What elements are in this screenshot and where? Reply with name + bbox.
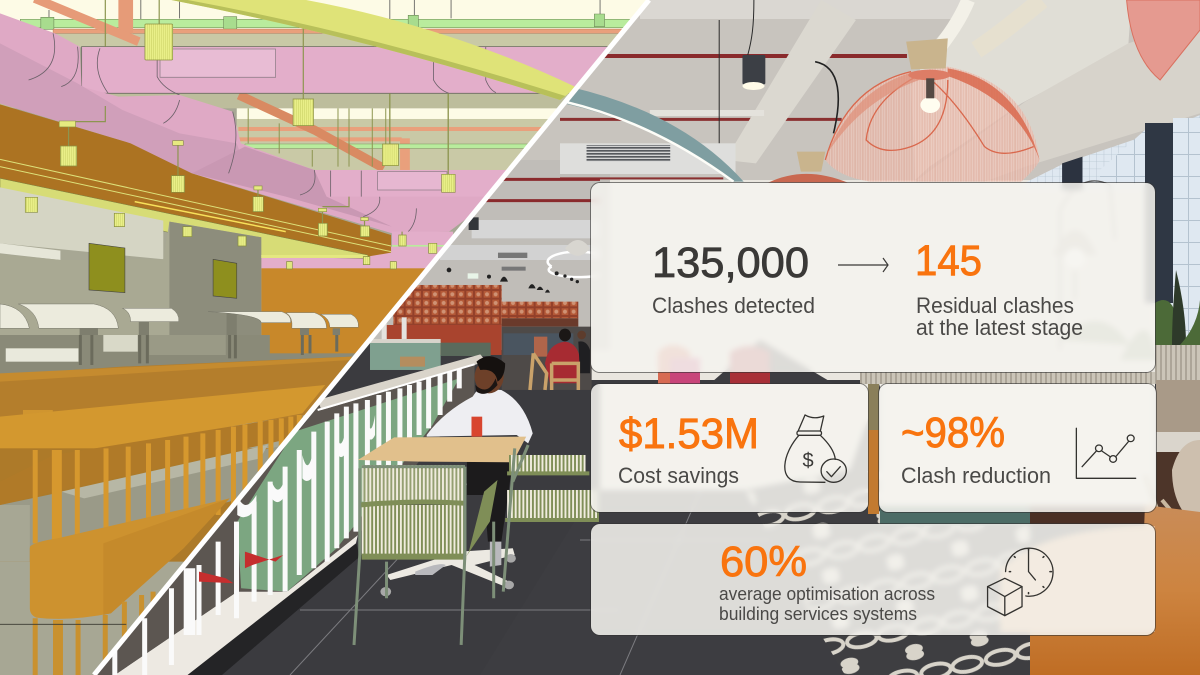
- label: cost savings: Cost savings: [618, 463, 739, 488]
- stat: 145: 145: [915, 237, 982, 285]
- right-hand furniture: [600, 118, 1200, 675]
- diagonal divider: [94, 0, 649, 675]
- orange bulkhead: [0, 104, 391, 258]
- area under rail: [0, 448, 268, 562]
- label: residual clashes: [916, 293, 1083, 340]
- upper pink duct: [82, 47, 653, 95]
- floor: [480, 340, 1030, 675]
- stat: $1.53M: $1.53M: [619, 410, 759, 458]
- table: [358, 437, 526, 462]
- lower mid services: [0, 94, 568, 108]
- stat: 135,000: 135,000: [652, 239, 809, 287]
- white arched balusters: [115, 367, 459, 675]
- black base: [188, 542, 360, 675]
- orange pipes: [118, 0, 133, 33]
- label: residual clashes: Residual clashes: [916, 293, 1074, 318]
- panel: cost savings: [591, 384, 868, 512]
- panel: clashes detected vs residual clashes: [591, 183, 1155, 372]
- stat: 60%: 60%: [720, 538, 807, 586]
- hangers: [59, 0, 448, 235]
- flower pendant lamp: [825, 38, 1040, 182]
- terrazzo top: [318, 354, 486, 410]
- pendant light: [742, 55, 765, 90]
- restaurant background: [370, 179, 600, 390]
- ceiling layer behind duct end: [262, 232, 454, 268]
- ceiling details: [560, 0, 1200, 190]
- label: average optimisation: building services systems: [719, 604, 917, 624]
- yellow arc beam: [171, 0, 576, 100]
- sneakers: [199, 552, 283, 583]
- icon: money bag with check: $: [802, 450, 814, 472]
- upper services: [0, 0, 653, 342]
- curved lower panel: [30, 498, 230, 619]
- icon: clock and cube: [988, 548, 1053, 616]
- panel: clash reduction: [879, 384, 1156, 512]
- green chair: [354, 445, 599, 645]
- balusters: [35, 415, 299, 548]
- orange wall: [261, 268, 426, 335]
- window: [1025, 115, 1200, 190]
- label: residual clashes: at the latest stage: [916, 315, 1083, 340]
- diners: [530, 329, 590, 390]
- label: average optimisation: average optimisation across: [719, 584, 935, 604]
- ceiling and far interior: [360, 0, 1200, 380]
- rail infill: [92, 363, 475, 675]
- coral lamp upper right: [1127, 0, 1200, 80]
- BIM model: left half: [0, 0, 660, 675]
- white ledge: [115, 535, 358, 675]
- legs below panel: [35, 592, 153, 675]
- seated man: [415, 356, 533, 575]
- icon: line chart: [1076, 428, 1136, 478]
- ducts and beam: [911, 0, 1131, 180]
- label: clashes detected: Clashes detected: [652, 293, 815, 318]
- lower pink duct: [0, 13, 518, 233]
- table base: [380, 548, 516, 596]
- arrow: [838, 258, 888, 272]
- walls: [0, 187, 367, 340]
- rail: [92, 354, 599, 675]
- stat: ~98%: ~98%: [901, 409, 1005, 457]
- plants: [1060, 270, 1200, 360]
- hood lights: [0, 304, 359, 335]
- label: average optimisation: [719, 584, 935, 624]
- label: clash reduction: Clash reduction: [901, 463, 1051, 488]
- suspended lamps: [25, 24, 455, 269]
- small coral lamp: [768, 152, 848, 183]
- tile rug: [745, 470, 1030, 675]
- wall lamp behind panel: [1060, 181, 1115, 350]
- green pipe: [20, 14, 653, 29]
- panel: average optimisation: [591, 524, 1155, 635]
- icon: money bag with check: [785, 415, 846, 482]
- lower model: counter and balustrade: [0, 335, 383, 675]
- curved ceiling light: [564, 87, 744, 182]
